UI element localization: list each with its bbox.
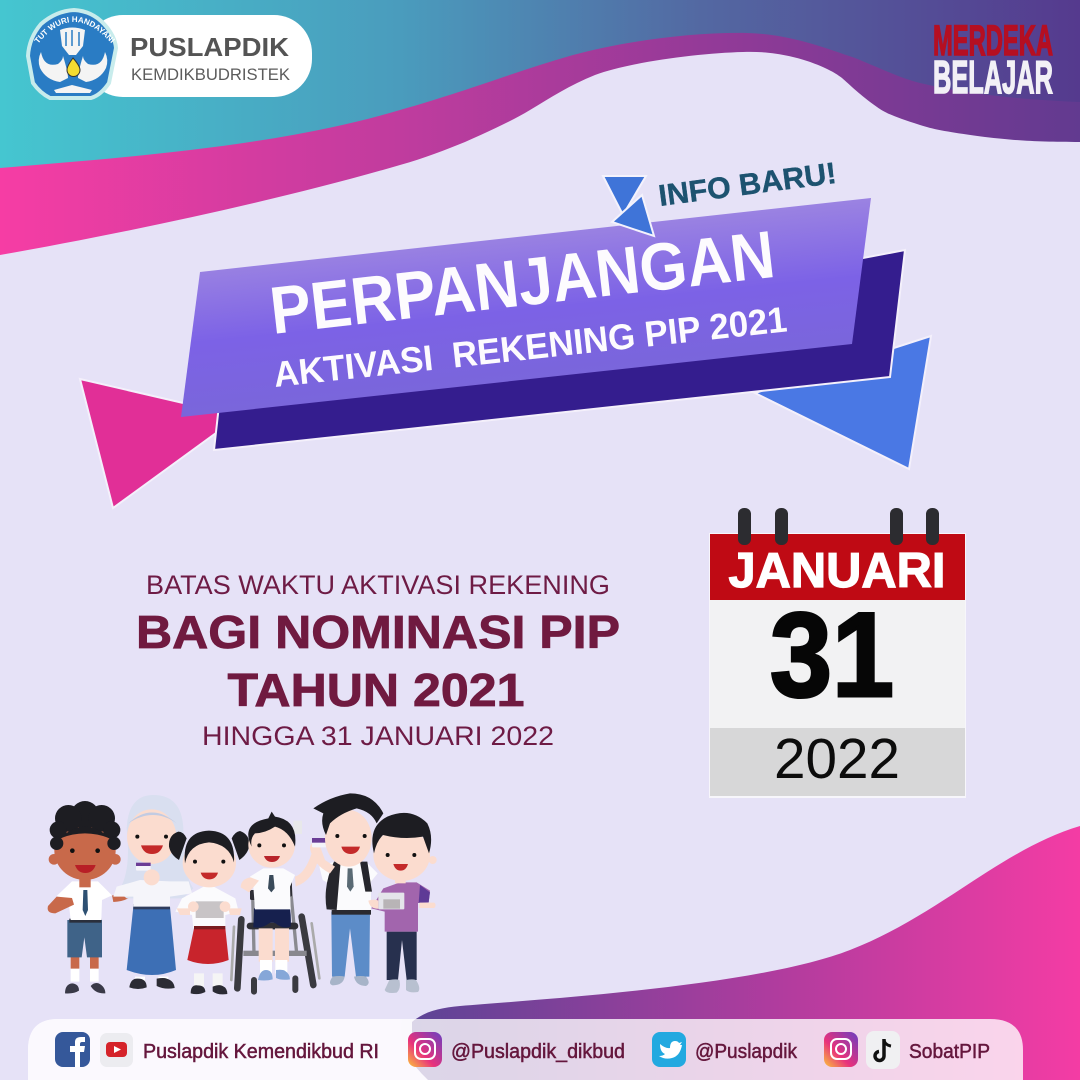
purple ribbon front bbox=[181, 198, 871, 417]
icon: instagram bbox=[408, 1032, 442, 1067]
bottom wave shape bbox=[412, 826, 1080, 1080]
footer opaque left panel bbox=[28, 1019, 428, 1080]
logo shield bbox=[26, 8, 118, 100]
footer social bar bbox=[28, 1019, 1023, 1080]
icon: tiktok bbox=[866, 1031, 900, 1069]
calendar day: 31 bbox=[770, 588, 894, 722]
calendar outline bbox=[709, 533, 966, 798]
dark ribbon back bbox=[214, 250, 905, 450]
icon: twitter bbox=[652, 1032, 686, 1067]
banner title: PERPANJANGAN bbox=[266, 217, 778, 349]
footer label: instagram: @Puslapdik_dikbud bbox=[451, 1041, 625, 1063]
header gradient shape bbox=[0, 0, 1080, 174]
organisation subtitle: KEMDIKBUDRISTEK bbox=[131, 65, 291, 84]
deadline line two: BAGI NOMINASI PIP bbox=[136, 606, 620, 658]
logo badge bbox=[26, 8, 312, 100]
merdeka belajar logo bbox=[933, 17, 1053, 103]
pink wave band bbox=[0, 33, 1080, 255]
student 2 bbox=[113, 795, 193, 989]
student 1 bbox=[48, 801, 142, 993]
calendar year strip bbox=[710, 728, 965, 796]
logo shield: TUT WURI HANDAYANI bbox=[34, 16, 116, 43]
calendar bbox=[709, 508, 966, 798]
calendar binding pegs bbox=[738, 508, 939, 545]
footer label: youtube facebook: Puslapdik Kemendikbud RI bbox=[143, 1041, 379, 1063]
pink ribbon tail bbox=[80, 379, 222, 508]
organisation name: PUSLAPDIK bbox=[130, 32, 289, 62]
footer translucent panel bbox=[28, 1019, 1023, 1080]
deadline line three: TAHUN 2021 bbox=[228, 664, 524, 716]
footer label: tiktok: SobatPIP bbox=[909, 1041, 990, 1063]
illustration: students bbox=[48, 793, 437, 994]
deadline text block bbox=[136, 570, 620, 751]
blue ribbon tail bbox=[755, 336, 931, 469]
icon: facebook bbox=[55, 1032, 90, 1067]
calendar body bbox=[710, 600, 965, 728]
info baru text: INFO BARU! bbox=[657, 157, 838, 213]
student 6 bbox=[368, 813, 437, 993]
deadline line four: HINGGA 31 JANUARI 2022 bbox=[202, 721, 554, 751]
icon: instagram sobat bbox=[824, 1032, 858, 1067]
icon: youtube bbox=[100, 1033, 133, 1067]
banner subtitle: AKTIVASI REKENING PIP 2021 bbox=[271, 298, 789, 395]
info baru tag bbox=[603, 157, 838, 236]
deadline line one: BATAS WAKTU AKTIVASI REKENING bbox=[146, 570, 610, 600]
logo pill bbox=[85, 15, 312, 97]
student 5 bbox=[310, 793, 383, 986]
calendar year: 2022 bbox=[774, 727, 900, 791]
student 3 bbox=[169, 831, 249, 994]
footer label: twitter: @Puslapdik bbox=[695, 1041, 798, 1063]
student 4 in wheelchair bbox=[231, 812, 319, 992]
banner ribbon bbox=[80, 198, 931, 508]
calendar month header bbox=[710, 534, 965, 600]
calendar month: JANUARI bbox=[728, 544, 946, 598]
info baru arrows icon bbox=[603, 176, 654, 236]
